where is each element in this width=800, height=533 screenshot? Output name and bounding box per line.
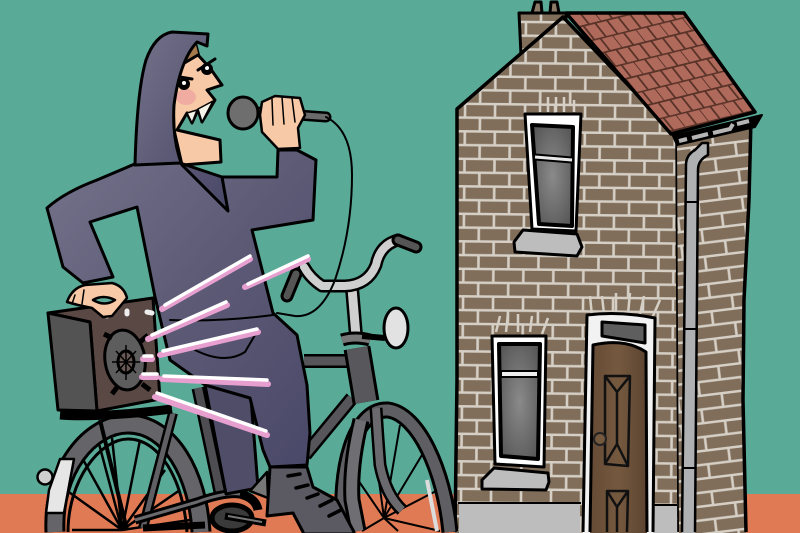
front wall <box>455 17 679 533</box>
handlebar <box>287 240 416 296</box>
mic cable <box>277 117 352 316</box>
singing hand <box>260 96 305 149</box>
frame tubes <box>304 348 366 455</box>
seat tube <box>198 388 220 492</box>
amp knobs <box>107 311 152 316</box>
upper window <box>514 114 582 256</box>
chainring and crank <box>212 505 266 531</box>
amp side panel <box>48 313 97 411</box>
fork <box>376 408 402 510</box>
hoodie and trousers <box>47 150 316 467</box>
cheek <box>176 89 196 105</box>
chain guard <box>135 494 258 528</box>
ground strip <box>0 494 800 533</box>
downpipe <box>682 143 708 533</box>
rack struts <box>100 413 173 530</box>
rack platform <box>60 409 172 416</box>
rear lamp <box>38 470 52 484</box>
pavement <box>458 503 677 533</box>
rear tyre and mudguard <box>55 424 201 532</box>
chimney <box>519 2 566 55</box>
amplifier <box>48 298 160 411</box>
mic handle <box>256 112 326 117</box>
microphone and hand <box>228 96 352 316</box>
eyes <box>178 59 215 90</box>
headlamp <box>362 308 408 348</box>
teeth <box>187 101 213 123</box>
amp top and front panel <box>48 298 160 411</box>
door upper panel <box>605 376 630 466</box>
back leg <box>205 385 258 494</box>
upper window sill <box>514 230 582 256</box>
rear wheel spokes <box>66 438 190 530</box>
bicycle rear parts <box>38 240 450 532</box>
stem <box>342 288 370 340</box>
front tyre <box>343 410 450 532</box>
hair <box>180 42 200 68</box>
house <box>455 2 762 533</box>
crossbar behind boot <box>250 472 268 498</box>
singer <box>47 32 355 533</box>
door knob <box>594 433 606 445</box>
face <box>173 55 222 165</box>
sound beams <box>142 256 308 435</box>
side wall <box>677 118 751 533</box>
boot <box>267 467 355 533</box>
hood <box>135 32 228 211</box>
white beam highlights <box>143 256 308 431</box>
lower window <box>482 336 549 490</box>
roof <box>566 13 755 134</box>
gutter <box>673 115 762 145</box>
waistband and pocket <box>170 315 273 358</box>
door <box>583 314 655 533</box>
front wheel spokes <box>358 425 440 531</box>
pink beam shadows <box>142 259 308 435</box>
door lower panel <box>607 491 628 532</box>
lower window sill <box>482 468 549 490</box>
amp speaker <box>101 328 150 394</box>
rear mudguard white patch <box>46 459 74 513</box>
brick arches above windows <box>496 97 660 334</box>
mic head <box>228 97 258 129</box>
front mudguard <box>352 420 361 531</box>
resting hand on amp <box>67 283 127 317</box>
